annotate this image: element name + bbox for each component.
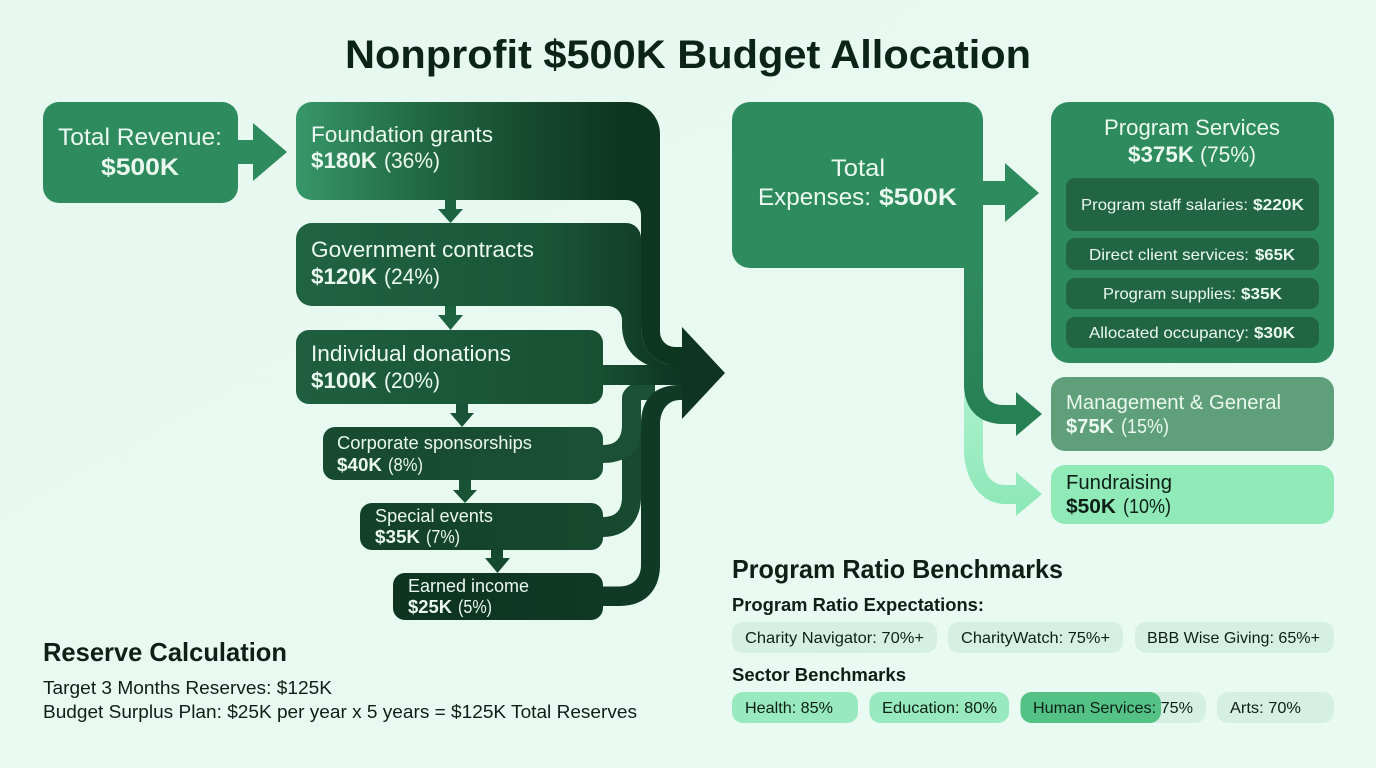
panel: management and general — [1051, 377, 1334, 451]
arrow: government to individual — [438, 306, 463, 330]
panel: fundraising — [1051, 465, 1334, 524]
government contracts text — [311, 237, 534, 289]
line item: direct client services: Direct client services: — [1089, 247, 1249, 264]
panel: fundraising: $50K — [1066, 496, 1117, 518]
band: earned income — [595, 385, 690, 606]
corporate sponsorships text: Corporate sponsorships — [337, 433, 532, 453]
panel: reserve calculation — [43, 637, 637, 722]
line item: direct client services — [1066, 238, 1319, 270]
foundation grants text: Foundation grants — [311, 122, 493, 147]
program services amount: (75%) — [1200, 142, 1256, 167]
individual donations text: (20%) — [384, 368, 440, 393]
total expenses text: Total — [831, 155, 885, 182]
chip: human services: Human Services: 75% — [1033, 700, 1193, 717]
corporate sponsorships text: $40K — [337, 455, 382, 475]
foundation grants text — [311, 122, 493, 173]
line item: allocated occupancy: $30K — [1254, 325, 1295, 342]
total revenue label: Total Revenue: — [58, 124, 222, 151]
total expenses text: Expenses: — [758, 184, 871, 211]
government contracts text: $120K — [311, 264, 377, 289]
sector subheading: Sector Benchmarks — [732, 665, 906, 685]
corporate sponsorships text: (8%) — [388, 455, 423, 475]
band: individual donations — [595, 365, 695, 385]
band and arrow: to management and general — [964, 240, 1042, 436]
reserve heading: Reserve Calculation — [43, 637, 287, 667]
chip: human services — [1020, 692, 1206, 723]
line item: direct client services: $65K — [1255, 247, 1295, 264]
line item: allocated occupancy: Allocated occupancy: — [1089, 325, 1249, 342]
box: earned income — [393, 573, 603, 620]
line item: program staff salaries: Program staff salaries: — [1081, 197, 1248, 214]
total expenses text — [758, 155, 958, 211]
special events text: $35K — [375, 527, 420, 547]
arrow: corporate to special — [453, 480, 477, 503]
benchmarks heading: Program Ratio Benchmarks — [732, 554, 1063, 584]
expectations subheading: Program Ratio Expectations: — [732, 595, 984, 615]
arrow: foundation to government — [438, 200, 463, 223]
surplus plan: Budget Surplus Plan: $25K per year x 5 years = $125K Total Reserves — [43, 702, 637, 722]
foundation grants text: $180K — [311, 148, 377, 173]
special events text: (7%) — [426, 527, 460, 547]
chip: education — [870, 692, 1009, 723]
government contracts text: (24%) — [384, 264, 440, 289]
earned income text: $25K — [408, 597, 452, 617]
chip: charity navigator: Charity Navigator: 70%+ — [745, 630, 924, 647]
panel: management and general: $75K — [1066, 416, 1115, 438]
panel: expenses flow — [732, 102, 1042, 516]
line item: program staff salaries: $220K — [1253, 197, 1304, 214]
box: individual donations — [296, 330, 603, 404]
total expenses text: $500K — [879, 184, 958, 211]
arrow: special to earned — [485, 550, 510, 573]
chip: arts — [1217, 692, 1334, 723]
line item: allocated occupancy — [1066, 317, 1319, 348]
box: total expenses — [732, 102, 983, 268]
chip: bbb wise giving: BBB Wise Giving: 65%+ — [1147, 630, 1320, 647]
band: special events — [595, 420, 641, 537]
line item: program supplies — [1066, 278, 1319, 309]
line item: program supplies: $35K — [1241, 286, 1282, 303]
panel: revenue sources flow — [296, 102, 725, 620]
foundation grants text: (36%) — [384, 148, 440, 173]
band and arrow: to fundraising — [964, 395, 1042, 516]
panel: program services — [1051, 102, 1334, 363]
box: special events — [360, 503, 603, 550]
chip: health: Health: 85% — [745, 700, 833, 717]
arrow: to program services — [975, 163, 1039, 222]
program services amount: $375K — [1128, 142, 1194, 167]
earned income text — [408, 576, 529, 617]
box: corporate sponsorships — [323, 427, 603, 480]
panel: program ratio benchmarks — [732, 554, 1334, 723]
panel: management and general: Management & General — [1066, 392, 1281, 414]
line item: program supplies: Program supplies: — [1103, 286, 1236, 303]
chip: health — [732, 692, 858, 723]
arrow: combined revenue head — [682, 327, 725, 419]
chip: charitywatch: CharityWatch: 75%+ — [961, 630, 1110, 647]
government contracts text: Government contracts — [311, 237, 534, 262]
arrow: revenue to sources — [230, 123, 287, 181]
individual donations text — [311, 341, 511, 393]
chip: charity navigator — [732, 622, 937, 653]
individual donations text: $100K — [311, 368, 377, 393]
chip: education: Education: 80% — [882, 700, 997, 717]
line item: program staff salaries — [1066, 178, 1319, 231]
reserve target: Target 3 Months Reserves: $125K — [43, 678, 332, 698]
box: foundation grants — [296, 102, 690, 366]
panel: total revenue — [43, 102, 287, 203]
earned income text: Earned income — [408, 576, 529, 596]
chip: arts: Arts: 70% — [1230, 700, 1301, 717]
chip: charitywatch — [948, 622, 1123, 653]
chip: bbb wise giving — [1135, 622, 1334, 653]
box: government contracts — [296, 223, 690, 368]
arrow: individual to corporate — [450, 404, 474, 427]
band: corporate sponsorships — [595, 384, 655, 463]
total revenue amount: $500K — [101, 154, 180, 181]
special events text: Special events — [375, 506, 493, 526]
corporate sponsorships text — [337, 433, 532, 475]
earned income text: (5%) — [458, 597, 492, 617]
panel: fundraising: Fundraising — [1066, 472, 1172, 494]
special events text — [375, 506, 493, 547]
program services heading: Program Services — [1104, 115, 1280, 140]
individual donations text: Individual donations — [311, 341, 511, 366]
panel: management and general: (15%) — [1121, 416, 1169, 438]
title: Nonprofit $500K Budget Allocation — [345, 33, 1031, 77]
panel: fundraising: (10%) — [1123, 496, 1171, 518]
program services amount — [1128, 142, 1256, 167]
